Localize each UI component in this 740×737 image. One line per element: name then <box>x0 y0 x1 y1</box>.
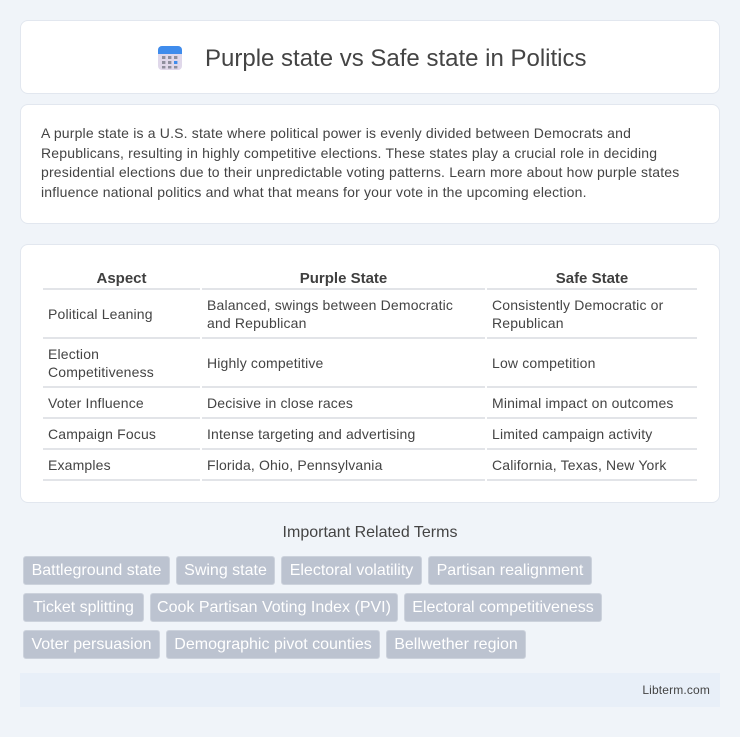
header: Safe State: Safe State <box>556 270 628 287</box>
intro card <box>20 104 720 224</box>
row: Voter Influence: Decisive in close races <box>207 395 353 411</box>
row: Political Leaning <box>48 297 664 331</box>
tag: Electoral volatility <box>290 562 413 579</box>
intro text: Republicans, resulting in highly competitive elections. These states play a crucial role in deciding <box>41 144 657 160</box>
tag <box>150 593 398 622</box>
row: Election Competitiveness: Election <box>48 346 99 362</box>
title: Purple state vs Safe state in Politics <box>205 45 587 72</box>
row: Examples: Florida, Ohio, Pennsylvania <box>207 457 383 473</box>
icon: calendar <box>158 46 182 70</box>
header: Aspect: Aspect <box>96 270 147 287</box>
tag <box>166 630 380 659</box>
row: Examples: Examples <box>48 457 111 473</box>
tag: Electoral competitiveness <box>412 599 594 616</box>
tag <box>23 556 170 585</box>
tag <box>23 630 160 659</box>
row: Election Competitiveness: Low competition <box>492 355 596 371</box>
tag <box>404 593 602 622</box>
tag: Partisan realignment <box>437 562 583 579</box>
tag <box>23 593 144 622</box>
footer text: Libterm.com <box>642 683 710 697</box>
row: Election Competitiveness <box>48 346 596 380</box>
row: Campaign Focus: Intense targeting and advertising <box>207 426 415 442</box>
row: Campaign Focus <box>48 426 652 442</box>
row: Election Competitiveness: Highly competitive <box>207 355 323 371</box>
header card <box>20 20 720 94</box>
row: Political Leaning: Political Leaning <box>48 306 153 322</box>
tag: Cook Partisan Voting Index (PVI) <box>157 599 391 616</box>
row: Examples <box>48 457 666 473</box>
tag: Swing state <box>184 562 267 579</box>
row: Political Leaning: Balanced, swings between Democratic <box>207 297 453 313</box>
intro text: influence national politics and what that means for your vote in the upcoming election. <box>41 184 587 200</box>
tag: Battleground state <box>32 562 161 579</box>
tag <box>176 556 275 585</box>
tag: Ticket splitting <box>33 599 134 616</box>
intro text: A purple state is a U.S. state where political power is evenly divided between Democrats and <box>41 125 631 141</box>
heading: related terms: Important Related Terms <box>283 524 457 541</box>
tag <box>428 556 592 585</box>
tag: Bellwether region <box>394 636 518 653</box>
table header row <box>96 270 628 287</box>
tag <box>386 630 526 659</box>
row: Campaign Focus: Campaign Focus <box>48 426 156 442</box>
row: Campaign Focus: Limited campaign activity <box>492 426 652 442</box>
tag: Voter persuasion <box>31 636 152 653</box>
footer bar <box>20 673 720 707</box>
row: Voter Influence: Voter Influence <box>48 395 144 411</box>
intro text <box>41 125 679 200</box>
row: Political Leaning: and Republican <box>207 315 307 331</box>
tag: Demographic pivot counties <box>174 636 372 653</box>
tag group: related terms <box>23 556 602 659</box>
row: Election Competitiveness: Competitiveness <box>48 364 154 380</box>
row: Political Leaning: Republican <box>492 315 564 331</box>
comparison table panel <box>20 244 720 503</box>
tag <box>281 556 422 585</box>
row: Political Leaning: Consistently Democratic or <box>492 297 663 313</box>
row: Voter Influence: Minimal impact on outcomes <box>492 395 674 411</box>
row: Examples: California, Texas, New York <box>492 457 666 473</box>
intro text: presidential elections due to their unpredictable voting patterns. Learn more about how purple states <box>41 164 679 180</box>
header: Purple State: Purple State <box>300 270 387 287</box>
row: Voter Influence <box>48 395 674 411</box>
